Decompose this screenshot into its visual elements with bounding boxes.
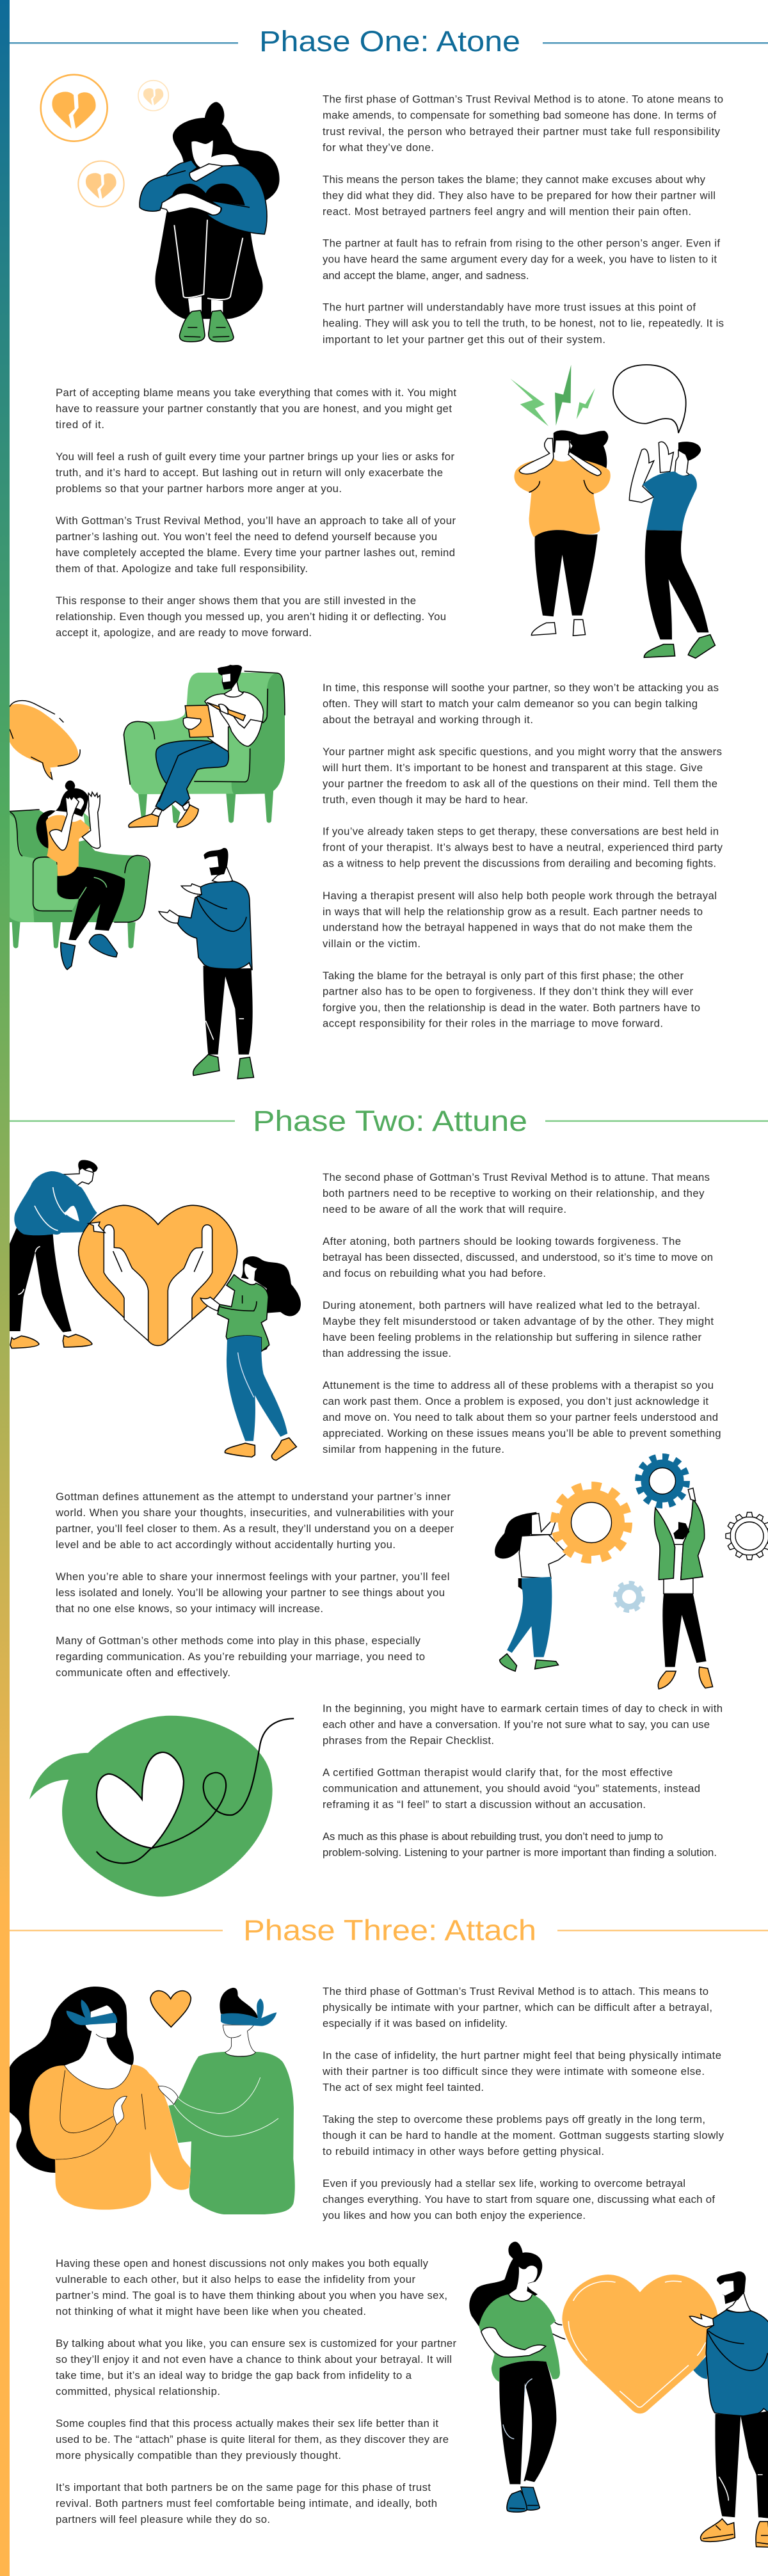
text block: soothing and therapy: If you’ve already taken steps to get therapy, these conversations are best held in xyxy=(323,826,719,837)
text block: phase three intro: The third phase of Gottman’s Trust Revival Method is to attach. This means to xyxy=(323,1985,708,1997)
text block: accepting blame: This response to their anger shows them that you are still invested in the xyxy=(56,595,416,607)
text block: accepting blame: have to reassure your partner constantly that you are honest, and you might get xyxy=(56,403,452,415)
text block: phase one intro xyxy=(323,93,724,346)
text block: soothing and therapy: partner also has to be open to forgiveness. If they don’t think they will ever xyxy=(323,986,693,997)
text block: open discussions: committed, physical relationship. xyxy=(56,2385,220,2397)
text block: open discussions: used to be. The “attach” phase is quite literal for them, as they discover they are xyxy=(56,2433,449,2445)
text block: phase one intro: The hurt partner will understandably have more trust issues at this point of xyxy=(323,301,696,314)
text block: repair checklist: problem-solving. Listening to your partner is more important than finding a solution. xyxy=(323,1846,717,1859)
text block: defining attunement: Gottman defines attunement as the attempt to understand your partner’s inner xyxy=(56,1491,451,1503)
figure: woman in green top xyxy=(200,1256,301,1460)
icon: big orange heart xyxy=(562,2275,718,2413)
text block: defining attunement: communicate often and effectively. xyxy=(56,1667,230,1679)
text block: soothing and therapy: forgive you, then the relationship is dead in the water. Both partners have to xyxy=(323,1002,700,1014)
text block: phase one intro: The first phase of Gottman’s Trust Revival Method is to atone. To atone means to xyxy=(323,93,723,105)
illustration: therapy session xyxy=(10,665,285,970)
text block: accepting blame: partner’s lashing out. You won’t feel the need to defend yourself because you xyxy=(56,531,437,543)
text block: soothing and therapy: Taking the blame for the betrayal is only part of this first phase; the other xyxy=(323,970,684,982)
text block: soothing and therapy: as a witness to help prevent the discussions from derailing and becoming fights. xyxy=(323,858,716,869)
text block: phase two intro: During atonement, both partners will have realized what led to the betrayal. xyxy=(323,1299,700,1311)
text block: phase one intro: and accept the blame, anger, and sadness. xyxy=(323,269,529,282)
text block: accepting blame: accept it, apologize, and are ready to move forward. xyxy=(56,627,312,639)
text block: open discussions: By talking about what you like, you can ensure sex is customized for your partner xyxy=(56,2337,456,2349)
text block: accepting blame: You will feel a rush of guilt every time your partner brings up your lies or asks for xyxy=(56,451,454,463)
figure: man, sleeve behind heart xyxy=(693,2355,707,2379)
illustration: couple holding a big heart xyxy=(469,2242,768,2547)
heading: Phase Two: Attune: Phase Two: Attune xyxy=(253,1105,527,1137)
text block: repair checklist: communication and attunement, you should avoid “you” statements, instead xyxy=(323,1782,700,1795)
text block: accepting blame: relationship. Even though you messed up, you aren’t hiding it or deflecting. You xyxy=(56,611,446,623)
text block: repair checklist: In the beginning, you might have to earmark certain times of day to check in with xyxy=(323,1702,723,1715)
text block: phase three intro: Even if you previously had a stellar sex life, working to overcome betrayal xyxy=(323,2177,685,2189)
speech bubble: orange xyxy=(10,701,80,780)
text block: phase three intro: changes everything. You have to start from square one, discussing what each of xyxy=(323,2193,715,2205)
figure: man in blue sweater xyxy=(10,1160,98,1348)
text block: soothing and therapy xyxy=(322,682,723,1029)
illustration: blindfolded couple xyxy=(10,1987,295,2214)
illustration: sad woman hugging her knees with broken hearts xyxy=(41,75,280,342)
icon: light blue gear xyxy=(616,1583,643,1610)
text block: phase two intro: can work past them. Once a problem is exposed, you don’t just acknowledge it xyxy=(323,1395,708,1407)
text block: soothing and therapy: in ways that will help the relationship grow as a result. Each partner needs to xyxy=(323,906,703,918)
icon: white heart xyxy=(97,1752,184,1848)
figure: woman raising orange gear xyxy=(495,1512,571,1671)
illustration: arguing couple with lightning bolts and speech bubble xyxy=(510,365,715,658)
text block: phase two intro xyxy=(323,1171,721,1455)
text block: phase one intro: trust revival, the person who betrayed their partner must take full responsibility xyxy=(323,125,721,138)
text block: soothing and therapy: often. They will start to match your calm demeanor so you can begin talking xyxy=(323,698,698,710)
armchair: therapist xyxy=(124,671,285,823)
text block: phase two intro: Maybe they felt misunderstood or taken advantage of by the other. They might xyxy=(323,1315,714,1327)
icon: outline gear, right xyxy=(726,1512,768,1560)
text block: open discussions: It’s important that both partners be on the same page for this phase of trust xyxy=(56,2481,431,2493)
text block: phase two intro: betrayal has been dissected, discussed, and understood, so it’s time to move on xyxy=(323,1251,713,1263)
icon: large heart with open hands xyxy=(79,1205,237,1345)
text block: defining attunement: When you’re able to share your innermost feelings with your partner, you’ll feel xyxy=(56,1571,449,1583)
text block: accepting blame: them of that. Apologize and take full responsibility. xyxy=(56,563,308,575)
figure: man raising blue gear xyxy=(655,1488,713,1689)
text block: defining attunement xyxy=(55,1491,454,1679)
figure: distressed client xyxy=(36,781,125,970)
text block: open discussions: partners will feel pleasure while they do so. xyxy=(56,2513,270,2525)
figures: woman and man xyxy=(495,1488,713,1689)
illustration: green speech blob with line-drawn heart xyxy=(29,1716,294,1897)
text block: phase one intro: react. Most betrayed partners feel angry and will mention their pain often. xyxy=(323,205,691,218)
text block: open discussions: more physically compatible than they previously thought. xyxy=(56,2449,341,2461)
figure: woman in green top xyxy=(469,2242,565,2512)
text block: accepting blame: problems so that your partner harbors more anger at you. xyxy=(56,483,342,495)
text block: open discussions: vulnerable to each other, but it also helps to ease the infidelity from your xyxy=(56,2273,415,2285)
icon: blue gear xyxy=(639,1457,686,1505)
figure: man shouting xyxy=(629,442,715,658)
text block: repair checklist: each other and have a conversation. If you’re not sure what to say, you can use xyxy=(323,1718,710,1731)
text block: open discussions: revival. Both partners must feel comfortable being intimate, and ideally, both xyxy=(56,2497,437,2509)
text block: phase three intro: The act of sex might feel tainted. xyxy=(323,2081,484,2093)
figure: partner standing, torso xyxy=(159,848,252,970)
icon: medium broken heart xyxy=(78,161,124,207)
text block: phase two intro: need to be aware of all the work that will require. xyxy=(323,1203,566,1215)
text block: accepting blame: tired of it. xyxy=(56,419,104,431)
text block: open discussions: not thinking of what it might have been like when you cheated. xyxy=(56,2305,366,2317)
text block: phase two intro: and move on. You need to talk about them so your partner feels understood and xyxy=(323,1411,718,1423)
armchair: client xyxy=(10,810,150,948)
text block: phase two intro: similar from happening in the future. xyxy=(323,1443,504,1455)
text block: open discussions: Some couples find that this process actually makes their sex life better than it xyxy=(56,2417,438,2429)
text block: repair checklist: As much as this phase is about rebuilding trust, you don’t need to jump to xyxy=(323,1830,663,1843)
figure: therapist taking notes xyxy=(129,665,264,828)
text block: defining attunement: partner, you’ll feel closer to them. As a result, they’ll understand you on a deeper xyxy=(56,1523,454,1535)
text block: repair checklist xyxy=(323,1702,723,1859)
figure: partner standing, legs xyxy=(193,966,253,1079)
text block: phase three intro: you likes and how you can both enjoy the experience. xyxy=(323,2209,586,2221)
icon: heart xyxy=(150,1991,191,2027)
text block: soothing and therapy: Your partner might ask specific questions, and you might worry that the answers xyxy=(323,746,722,758)
figure: woman in orange xyxy=(10,1987,191,2210)
icon: large broken heart xyxy=(41,75,108,141)
text block: open discussions: partner’s mind. The goal is to have them thinking about you when you have sex, xyxy=(56,2289,447,2301)
text block: defining attunement: world. When you share your thoughts, insecurities, and vulnerabilities with your xyxy=(55,1507,454,1519)
illustration: two people holding a heart with hands xyxy=(10,1160,301,1460)
text block: open discussions xyxy=(56,2257,456,2525)
text block: soothing and therapy: front of your therapist. It’s always best to have a neutral, experienced third party xyxy=(323,841,723,854)
text block: soothing and therapy: villain or the victim. xyxy=(323,938,420,950)
text block: phase one intro: The partner at fault has to refrain from rising to the other person’s anger. Even if xyxy=(323,237,720,250)
figure: man in green xyxy=(168,1988,295,2214)
illustration: two people with gears xyxy=(495,1457,768,1689)
text block: phase two intro: After atoning, both partners should be looking towards forgiveness. The xyxy=(323,1235,681,1247)
text block: phase three intro: In the case of infidelity, the hurt partner might feel that being physically intimate xyxy=(323,2049,721,2061)
text block: phase three intro: especially if it was based on infidelity. xyxy=(323,2017,508,2029)
icon: speech bubble xyxy=(613,365,686,433)
figure: woman xyxy=(140,102,280,342)
text block: phase two intro: The second phase of Gottman’s Trust Revival Method is to attune. That means xyxy=(323,1171,710,1183)
text block: phase two intro: both partners need to be receptive to working on their relationship, and they xyxy=(323,1187,705,1199)
text block: soothing and therapy: will hurt them. It’s important to be honest and transparent at this stage. Give xyxy=(322,762,703,774)
text block: accepting blame xyxy=(56,387,456,639)
text block: phase three intro: with their partner is too difficult since they were intimate with someone else. xyxy=(322,2065,705,2077)
speech blob xyxy=(29,1716,273,1897)
squiggle line xyxy=(97,1718,294,1863)
text block: phase one intro: make amends, to compensate for something bad someone has done. In terms of xyxy=(323,109,716,122)
text block: phase one intro: you have heard the same argument every day for a week, you have to listen to it xyxy=(323,253,717,265)
text block: defining attunement: that no one else knows, so your intimacy will increase. xyxy=(56,1603,323,1615)
text block: open discussions: take time, but it’s an ideal way to bridge the gap back from infidelity to a xyxy=(56,2369,412,2381)
text block: soothing and therapy: truth, even though it may be hard to hear. xyxy=(323,794,528,806)
text block: phase two intro: than addressing the issue. xyxy=(323,1347,451,1359)
text block: phase three intro xyxy=(322,1985,724,2221)
text block: phase two intro: appreciated. Working on these issues means you’ll be able to prevent something xyxy=(323,1427,721,1439)
text block: phase one intro: This means the person takes the blame; they cannot make excuses about why xyxy=(323,173,706,186)
text block: accepting blame: Part of accepting blame means you take everything that comes with it. You might xyxy=(56,387,456,399)
figure: woman covering ears xyxy=(514,430,611,636)
text block: phase two intro: and focus on rebuilding what you had before. xyxy=(323,1267,546,1279)
text block: phase two intro: Attunement is the time to address all of these problems with a therapist so you xyxy=(323,1379,714,1391)
text block: defining attunement: level and be able to act accordingly without accidentally hurting you. xyxy=(56,1539,396,1551)
text block: phase one intro: they did what they did. They also have to be prepared for how their partner will xyxy=(323,189,716,202)
gradient side bar xyxy=(0,0,10,2576)
text block: repair checklist: phrases from the Repair Checklist. xyxy=(323,1734,494,1747)
text block: phase three intro: to rebuild intimacy in other ways before getting physical. xyxy=(323,2145,604,2157)
figure: man in blue jacket xyxy=(689,2271,768,2547)
icon: lightning bolts xyxy=(510,365,595,426)
text block: soothing and therapy: In time, this response will soothe your partner, so they won’t be attacking you as xyxy=(323,682,719,694)
text block: defining attunement: less isolated and lonely. You’ll be allowing your partner to see things about you xyxy=(56,1587,445,1599)
text block: soothing and therapy: Having a therapist present will also help both people work through the betrayal xyxy=(323,890,717,902)
text block: phase one intro: for what they’ve done. xyxy=(323,141,434,154)
text block: open discussions: so they’ll enjoy it and not even have a chance to think about your betrayal. It will xyxy=(56,2353,452,2365)
text block: phase one intro: important to let your partner get this out of their system. xyxy=(323,333,605,346)
text block: accepting blame: have completely accepted the blame. Every time your partner lashes out, remind xyxy=(56,547,455,559)
text block: phase three intro: though it can be hard to handle at the moment. Gottman suggests starting slowly xyxy=(323,2129,724,2141)
text block: phase three intro: physically be intimate with your partner, which can be difficult after a betrayal, xyxy=(323,2001,712,2013)
text block: soothing and therapy: understand how the betrayal happened in ways that do not make them the xyxy=(323,922,692,933)
text block: repair checklist: reframing it as “I feel” to start a discussion without an accusation. xyxy=(323,1798,646,1811)
heading: Phase Three: Attach: Phase Three: Attach xyxy=(243,1914,536,1947)
text block: soothing and therapy: about the betrayal and working through it. xyxy=(323,714,533,726)
text block: phase two intro: have been feeling problems in the relationship but suffering in silence rather xyxy=(323,1331,701,1343)
text block: defining attunement: regarding communication. As you’re rebuilding your marriage, you need to xyxy=(56,1651,425,1663)
text block: open discussions: Having these open and honest discussions not only makes you both equally xyxy=(56,2257,429,2269)
icon: orange gear xyxy=(554,1486,628,1559)
text block: accepting blame: truth, and it’s hard to accept. But lashing out in return will only exacerbate the xyxy=(56,467,443,479)
text block: repair checklist: A certified Gottman therapist would clarify that, for the most effective xyxy=(323,1766,673,1779)
text block: soothing and therapy: accept responsibility for their roles in the marriage to move forward. xyxy=(323,1018,663,1029)
icon: faded broken heart xyxy=(138,81,168,111)
text block: accepting blame: With Gottman’s Trust Revival Method, you’ll have an approach to take all of your xyxy=(56,515,456,527)
text block: defining attunement: Many of Gottman’s other methods come into play in this phase, especially xyxy=(56,1635,421,1647)
text block: phase one intro: healing. They will ask you to tell the truth, to be honest, not to lie, repeatedly. It is xyxy=(323,317,724,329)
text block: phase three intro: Taking the step to overcome these problems pays off greatly in the long term, xyxy=(323,2113,705,2125)
heading: Phase One: Atone: Phase One: Atone xyxy=(259,25,520,58)
text block: soothing and therapy: your partner the freedom to ask all of the questions on their mind. Tell them the xyxy=(323,778,717,790)
